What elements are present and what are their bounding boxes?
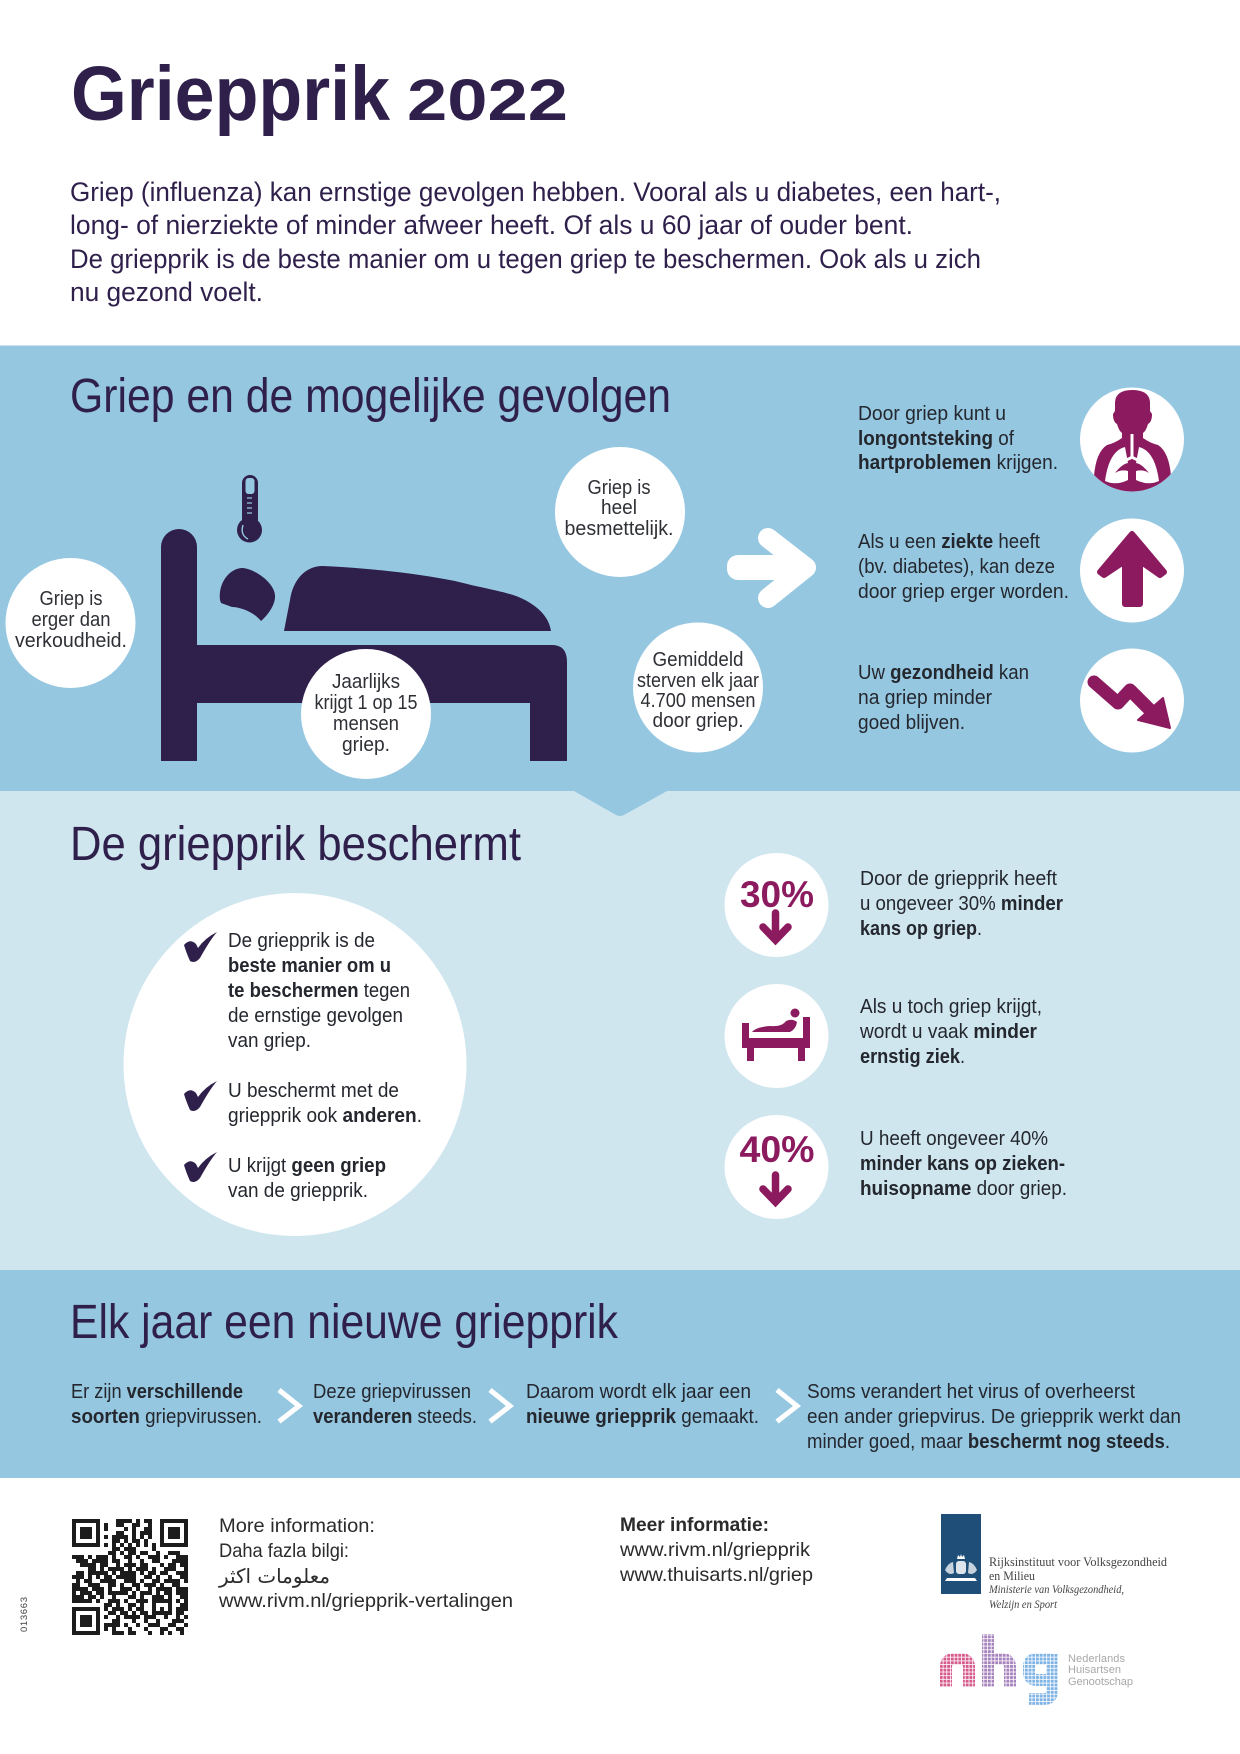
text: gezondheid	[858, 662, 1029, 734]
heading: griepprik beschermt: De griepprik beschermt	[70, 818, 521, 871]
heading: griep en gevolgen: Griep en de mogelijke gevolgen	[70, 370, 671, 423]
intro text: Griep (influenza) kan ernstige gevolgen hebben. Vooral als u diabetes, een hart-,	[70, 177, 1001, 207]
logo: rijksoverheid: en Milieu	[989, 1569, 1036, 1583]
text: 30% minder kans: Door de griepprik heeft	[860, 868, 1057, 890]
callout: protection checklist circle: griepprik ook anderen.	[228, 1105, 422, 1127]
heading: nieuwe griepprik: Elk jaar een nieuwe griepprik	[70, 1296, 619, 1349]
step 4 text: een ander griepvirus. De griepprik werkt dan	[807, 1406, 1181, 1428]
callout: 4.700 mensen: door griep.	[652, 710, 744, 732]
callout: protection checklist circle: de ernstige gevolgen	[228, 1005, 403, 1027]
text: 30% minder kans: kans op griep.	[860, 918, 982, 940]
callout: protection checklist circle: De griepprik is de	[228, 930, 375, 952]
callout: protection checklist circle: te beschermen tegen	[228, 980, 410, 1002]
logo: nhg: Genootschap	[1068, 1676, 1133, 1688]
title: 2022	[407, 68, 568, 133]
meer informatie	[619, 1514, 813, 1586]
callout: 4.700 mensen: sterven elk jaar	[637, 670, 759, 692]
callout: jaarlijks 1 op 15: krijgt 1 op 15	[314, 692, 418, 714]
panel: de griepprik beschermt	[0, 791, 1240, 1270]
callout: griep is heel besmettelijk: heel	[601, 497, 637, 519]
callout: protection checklist circle	[124, 893, 466, 1236]
pointer triangle	[574, 791, 667, 816]
icon: 30% down: 30%	[740, 874, 814, 915]
step 1 text: Er zijn verschillende	[71, 1381, 243, 1403]
text: longontsteking: hartproblemen krijgen.	[858, 452, 1058, 474]
step 3 text: Daarom wordt elk jaar een	[526, 1381, 751, 1403]
callout: jaarlijks 1 op 15	[301, 649, 431, 779]
translations info: معلومات اكثر	[218, 1564, 330, 1588]
chevron 2	[490, 1390, 510, 1422]
text: 40% ziekenhuisopname	[860, 1128, 1067, 1200]
icon: 30% down	[724, 853, 828, 957]
panel: griep en de mogelijke gevolgen	[0, 346, 1240, 791]
callout: griep is heel besmettelijk: Griep is	[588, 477, 650, 499]
meer informatie: Meer informatie:	[620, 1514, 769, 1536]
icon: falling trend arrow	[1080, 648, 1184, 752]
step 1 text	[71, 1381, 262, 1428]
icon: sick person in bed	[161, 529, 567, 761]
callout: protection checklist circle: U krijgt geen griep	[228, 1155, 386, 1177]
icon: 40% down: 40%	[740, 1129, 814, 1170]
logo: nhg	[946, 1634, 1133, 1699]
icon: check 3	[184, 1152, 217, 1182]
panel: elk jaar een nieuwe griepprik	[0, 1270, 1240, 1478]
callout: griep is erger dan verkoudheid: verkoudheid.	[15, 630, 127, 652]
intro text: nu gezond voelt.	[70, 277, 263, 307]
text: minder ernstig ziek: Als u toch griep krijgt,	[860, 996, 1042, 1018]
callout: 4.700 mensen	[633, 622, 763, 752]
text: minder ernstig ziek: wordt u vaak minder	[859, 1021, 1037, 1043]
meer informatie: www.rivm.nl/griepprik	[619, 1539, 810, 1561]
text: 40% ziekenhuisopname: U heeft ongeveer 40%	[860, 1128, 1048, 1150]
translations info	[218, 1515, 513, 1612]
text: 40% ziekenhuisopname: huisopname door griep.	[860, 1178, 1067, 1200]
text: 30% minder kans: u ongeveer 30% minder	[860, 893, 1063, 915]
intro text: De griepprik is de beste manier om u tegen griep te beschermen. Ook als u zich	[70, 244, 981, 274]
step 3 text: nieuwe griepprik gemaakt.	[526, 1406, 759, 1428]
text: gezondheid: na griep minder	[858, 687, 992, 709]
callout: jaarlijks 1 op 15: Jaarlijks	[332, 671, 400, 693]
callout: 4.700 mensen: Gemiddeld	[652, 649, 744, 671]
logo: rijksoverheid	[941, 1514, 1168, 1611]
translations info: Daha fazla bilgi:	[219, 1540, 349, 1562]
text: gezondheid: Uw gezondheid kan	[858, 662, 1029, 684]
text: 30% minder kans	[860, 868, 1063, 940]
icon: 40% down	[724, 1115, 828, 1219]
callout: jaarlijks 1 op 15: griep.	[342, 734, 390, 756]
meer informatie: www.thuisarts.nl/griep	[619, 1564, 813, 1586]
chevron 3	[777, 1390, 797, 1422]
title: Griepprik	[71, 51, 390, 137]
document number: 013663	[19, 1597, 30, 1632]
intro text	[70, 177, 1001, 307]
step 4 text: minder goed, maar beschermt nog steeds.	[807, 1431, 1170, 1453]
text: minder ernstig ziek: ernstig ziek.	[860, 1046, 965, 1068]
translations info: More information:	[219, 1515, 375, 1537]
step 2 text: veranderen steeds.	[313, 1406, 477, 1428]
step 2 text	[313, 1381, 477, 1428]
icon: lungs	[1080, 388, 1184, 500]
title	[71, 51, 568, 137]
logo: rijksoverheid: Ministerie van Volksgezondheid,	[988, 1582, 1124, 1596]
text: longontsteking: longontsteking of	[858, 428, 1014, 450]
step 2 text: Deze griepvirussen	[313, 1381, 471, 1403]
step 3 text	[526, 1381, 759, 1428]
text: ziekte erger: (bv. diabetes), kan deze	[858, 556, 1055, 578]
text: longontsteking: Door griep kunt u	[858, 403, 1006, 425]
logo: rijksoverheid: Rijksinstituut voor Volksgezondheid	[989, 1555, 1168, 1569]
text: gezondheid: goed blijven.	[858, 712, 965, 734]
icon: check 2	[184, 1081, 217, 1111]
callout: protection checklist circle: van griep.	[228, 1030, 311, 1052]
step 1 text: soorten griepvirussen.	[71, 1406, 262, 1428]
text: ziekte erger: Als u een ziekte heeft	[858, 531, 1040, 553]
callout: griep is erger dan verkoudheid	[6, 558, 136, 688]
callout: griep is heel besmettelijk: besmettelijk.	[564, 518, 674, 540]
arrow: white right arrow	[727, 538, 806, 598]
text: ziekte erger: door griep erger worden.	[858, 581, 1069, 603]
translations info: www.rivm.nl/griepprik-vertalingen	[218, 1590, 513, 1612]
callout: griep is heel besmettelijk	[555, 447, 685, 577]
callout: griep is erger dan verkoudheid: erger dan	[32, 609, 110, 631]
icon: thermometer	[237, 475, 262, 542]
text: ziekte erger	[858, 531, 1069, 603]
text: minder ernstig ziek	[859, 996, 1042, 1068]
step 4 text	[807, 1381, 1181, 1453]
callout: protection checklist circle: U beschermt met de	[228, 1080, 399, 1102]
callout: protection checklist circle: van de griepprik.	[228, 1180, 368, 1202]
callout: 4.700 mensen: 4.700 mensen	[640, 690, 756, 712]
text: longontsteking	[858, 403, 1058, 474]
logo: nhg: Huisartsen	[1068, 1664, 1121, 1676]
icon: check 1	[184, 932, 217, 962]
callout: protection checklist circle: beste manier om u	[228, 955, 391, 977]
QR code	[72, 1521, 188, 1633]
intro text: long- of nierziekte of minder afweer heeft. Of als u 60 jaar of ouder bent.	[70, 210, 913, 240]
step 4 text: Soms verandert het virus of overheerst	[807, 1381, 1135, 1403]
logo: nhg: Nederlands	[1068, 1653, 1126, 1665]
icon: up arrow	[1080, 518, 1184, 622]
chevron 1	[279, 1390, 299, 1422]
text: 40% ziekenhuisopname: minder kans op zieken-	[860, 1153, 1065, 1175]
logo: rijksoverheid: Welzijn en Sport	[989, 1597, 1058, 1611]
callout: jaarlijks 1 op 15: mensen	[333, 713, 399, 735]
callout: griep is erger dan verkoudheid: Griep is	[40, 588, 102, 610]
icon: small bed	[724, 984, 828, 1088]
